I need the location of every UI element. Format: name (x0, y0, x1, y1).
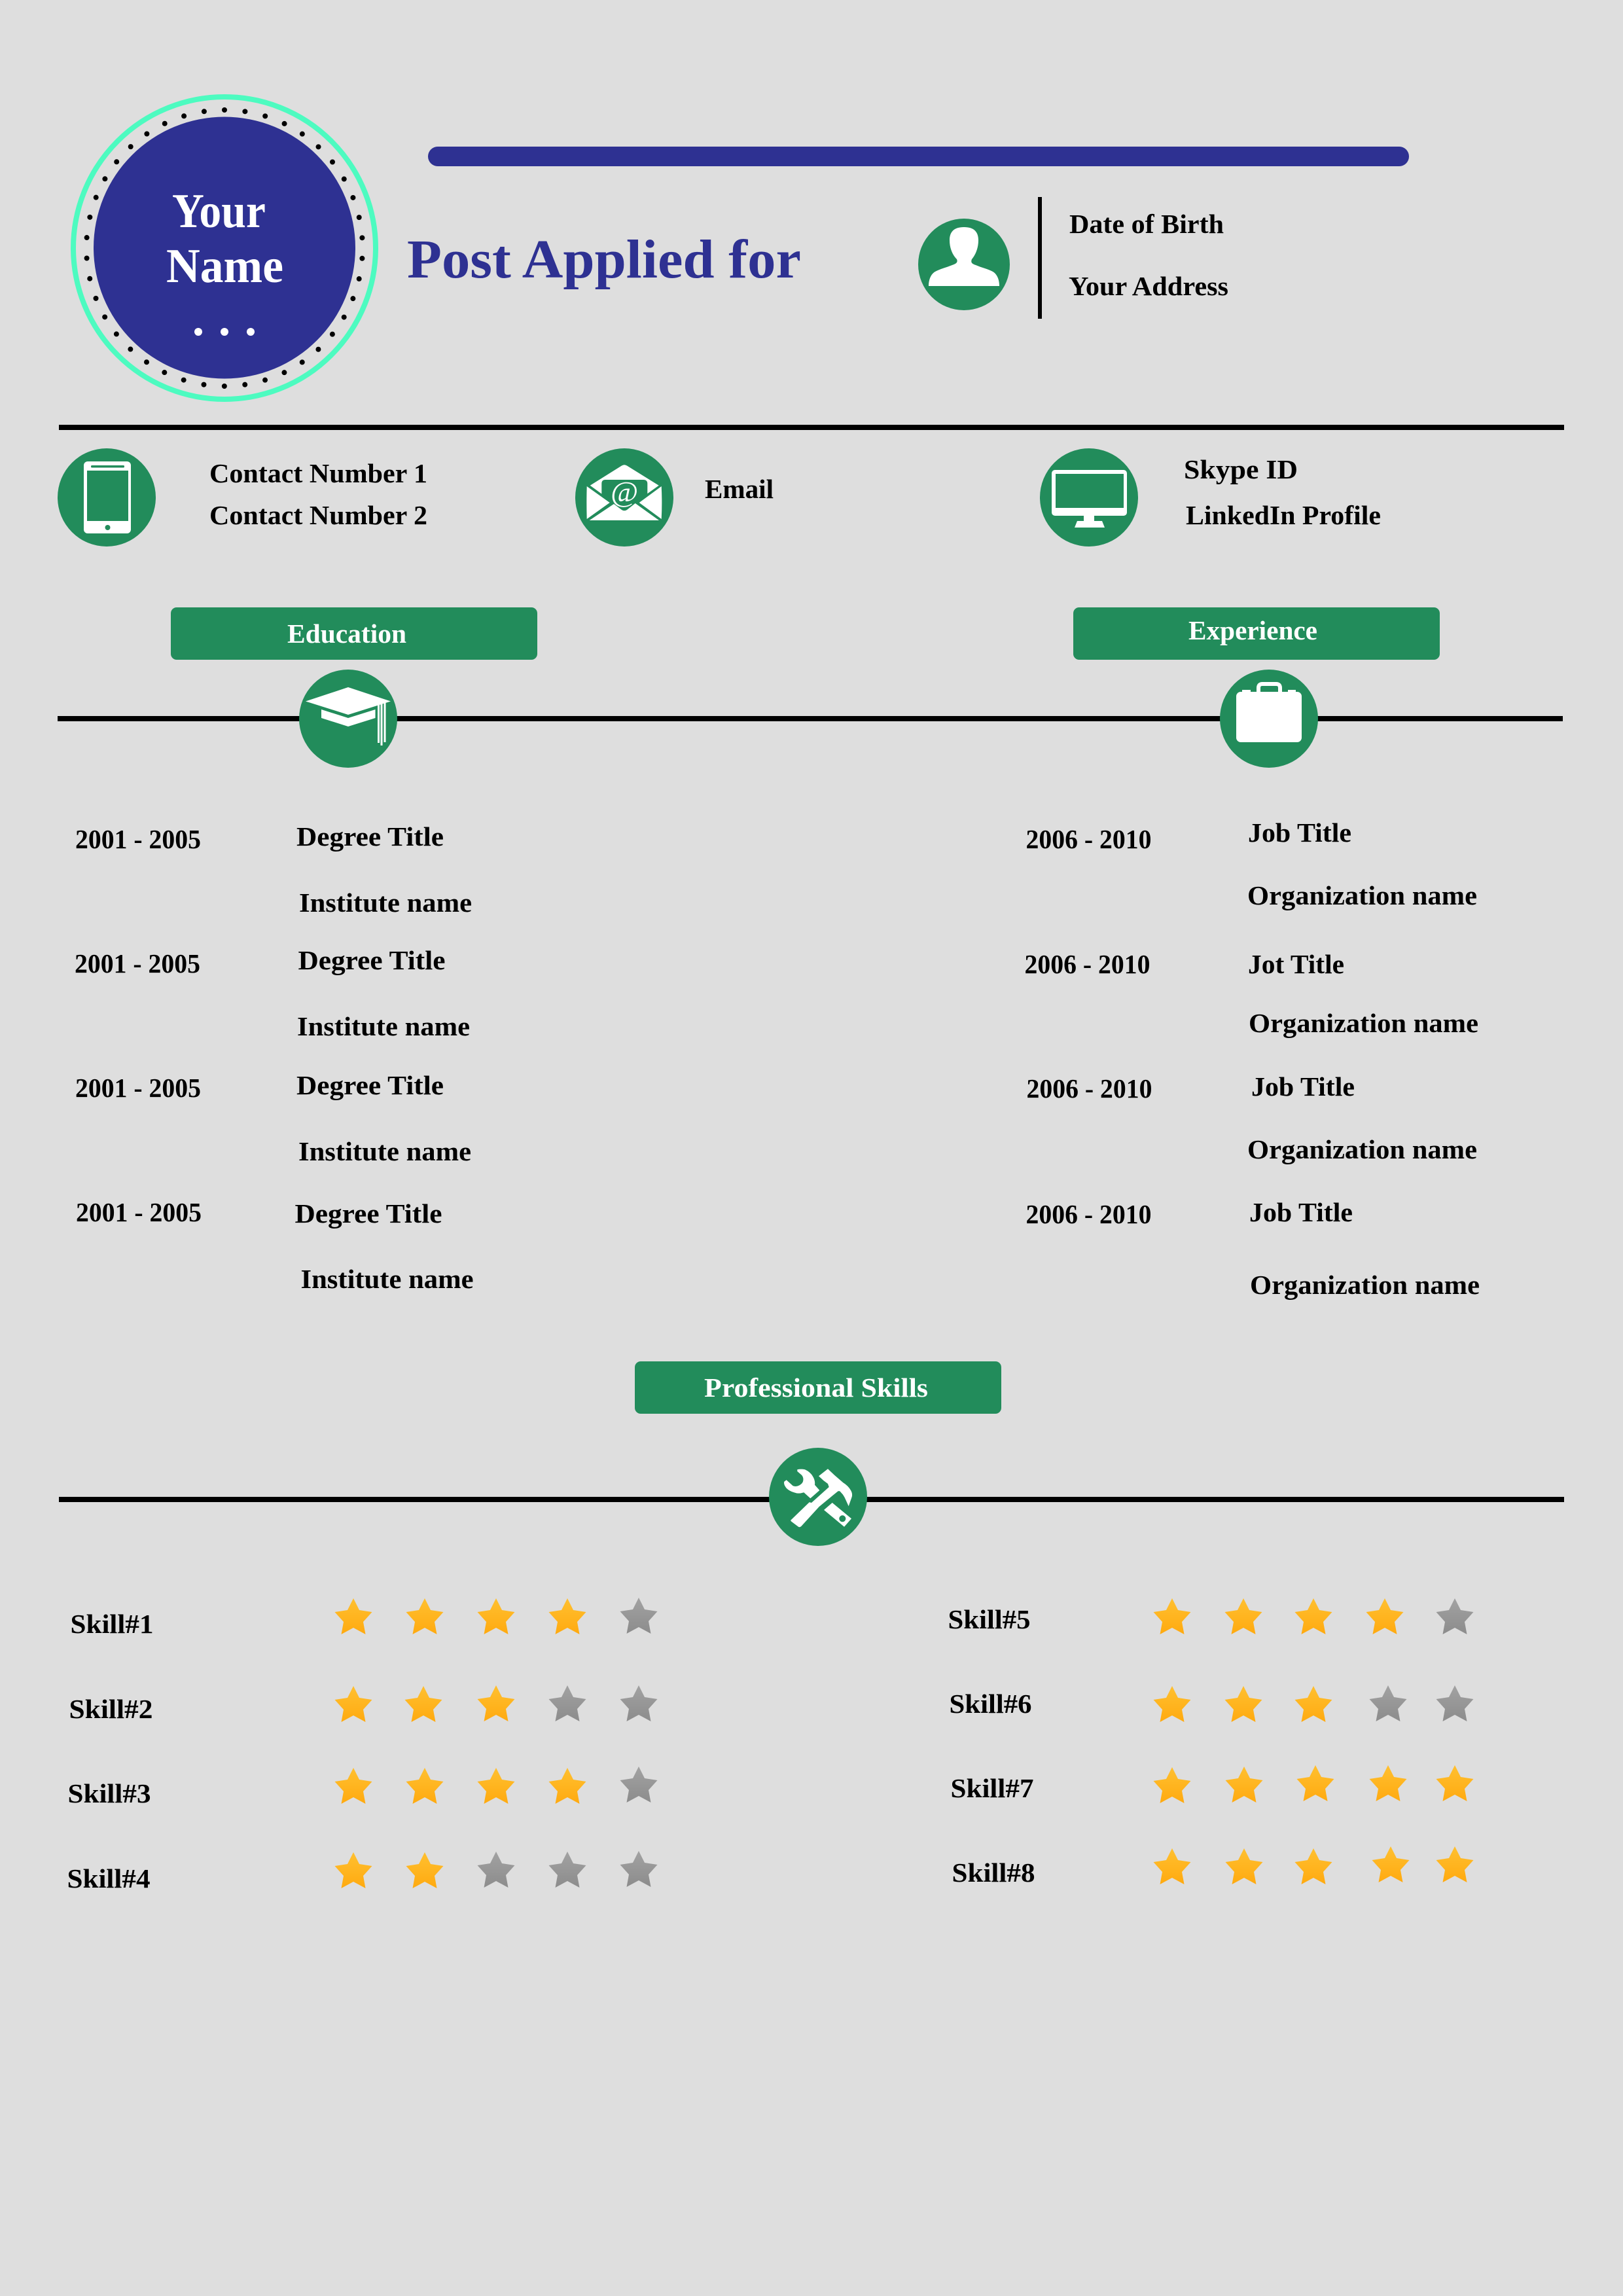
skill labels left (67, 1609, 153, 1893)
experience entry 3: Organization name (1247, 1134, 1477, 1164)
online profiles (1184, 454, 1381, 530)
icon: email envelope (575, 448, 673, 547)
education entry 4: Degree Title (294, 1198, 442, 1229)
experience entry 1 (1026, 817, 1477, 910)
experience entry 2: 2006 - 2010 (1025, 949, 1150, 979)
icon: email envelope: @ (611, 476, 638, 508)
skill labels left: Skill#2 (69, 1694, 153, 1724)
email label: Email (705, 474, 774, 504)
title: post applied for: Post Applied for (407, 229, 801, 290)
name text: Your (172, 185, 266, 238)
education entry 2: Institute name (297, 1011, 470, 1041)
experience entry 2: Jot Title (1248, 949, 1344, 979)
education entry 1: Degree Title (296, 821, 444, 852)
education entry 1: Institute name (299, 888, 472, 918)
skill labels left: Skill#1 (71, 1609, 153, 1639)
star rating: skill 4 (335, 1851, 657, 1888)
education entry 1: 2001 - 2005 (75, 824, 201, 854)
star rating: skill 5 (1153, 1598, 1474, 1634)
online profiles: Skype ID (1184, 454, 1298, 484)
education entry 4: Institute name (301, 1264, 474, 1294)
name badge (73, 97, 376, 399)
personal details (1069, 209, 1228, 301)
education entry 4 (76, 1197, 474, 1294)
experience entry 4: 2006 - 2010 (1026, 1199, 1152, 1229)
education entry 2 (75, 945, 470, 1041)
experience entry 1: 2006 - 2010 (1026, 824, 1152, 854)
experience entry 3 (1026, 1071, 1477, 1164)
three white dots (194, 328, 255, 336)
star rating: skill 2 (335, 1685, 657, 1722)
experience entries (1025, 817, 1480, 1300)
education heading: Education (287, 619, 406, 649)
education entry 2: 2001 - 2005 (75, 948, 200, 978)
icon: phone (58, 448, 156, 547)
education heading (171, 607, 537, 660)
name text: Name (166, 240, 283, 293)
experience entry 2: Organization name (1249, 1008, 1478, 1038)
personal details: Date of Birth (1069, 209, 1224, 239)
skill labels left: Skill#4 (67, 1863, 151, 1893)
star rating: skill 8 (1153, 1846, 1474, 1884)
experience entry 1: Organization name (1247, 880, 1477, 910)
star rating: skill 7 (1153, 1765, 1474, 1803)
education entry 4: 2001 - 2005 (76, 1197, 202, 1227)
professional skills heading: Professional Skills (704, 1372, 928, 1403)
icon: graduation cap (299, 670, 397, 768)
skill labels right: Skill#7 (950, 1773, 1034, 1803)
education entries (75, 821, 474, 1294)
skill labels left: Skill#3 (68, 1778, 151, 1808)
education entry 1 (75, 821, 472, 918)
icon: briefcase (1220, 670, 1318, 768)
professional skills heading (635, 1361, 1001, 1414)
skill labels right: Skill#5 (948, 1604, 1030, 1634)
experience heading: Experience (1188, 615, 1317, 645)
experience entry 4: Job Title (1249, 1197, 1353, 1227)
star rating: skill 6 (1153, 1685, 1474, 1722)
experience entry 1: Job Title (1248, 817, 1351, 848)
experience entry 4: Organization name (1250, 1270, 1480, 1300)
experience entry 3: Job Title (1251, 1071, 1355, 1102)
education entry 3: 2001 - 2005 (75, 1073, 201, 1103)
experience entry 2 (1025, 949, 1478, 1038)
online profiles: LinkedIn Profile (1186, 500, 1381, 530)
icon: hammer and wrench (769, 1448, 867, 1546)
personal details: Your Address (1069, 271, 1228, 301)
experience heading (1073, 607, 1440, 660)
skill labels right: Skill#8 (952, 1857, 1035, 1888)
skill labels right: Skill#6 (949, 1689, 1031, 1719)
icon: person (918, 219, 1010, 310)
icon: monitor (1040, 448, 1138, 547)
contact numbers: Contact Number 1 (209, 458, 427, 488)
star rating: skill 1 (335, 1598, 657, 1634)
education entry 3: Institute name (298, 1136, 471, 1166)
experience entry 4 (1026, 1197, 1480, 1300)
name text (166, 185, 283, 293)
education entry 3: Degree Title (296, 1070, 444, 1100)
contact numbers (209, 458, 427, 530)
experience entry 3: 2006 - 2010 (1026, 1073, 1152, 1103)
contact numbers: Contact Number 2 (209, 500, 427, 530)
education entry 3 (75, 1070, 471, 1166)
header bar (428, 147, 1409, 166)
skill labels right (948, 1604, 1035, 1888)
star rating: skill 3 (335, 1767, 657, 1804)
education entry 2: Degree Title (298, 945, 445, 975)
